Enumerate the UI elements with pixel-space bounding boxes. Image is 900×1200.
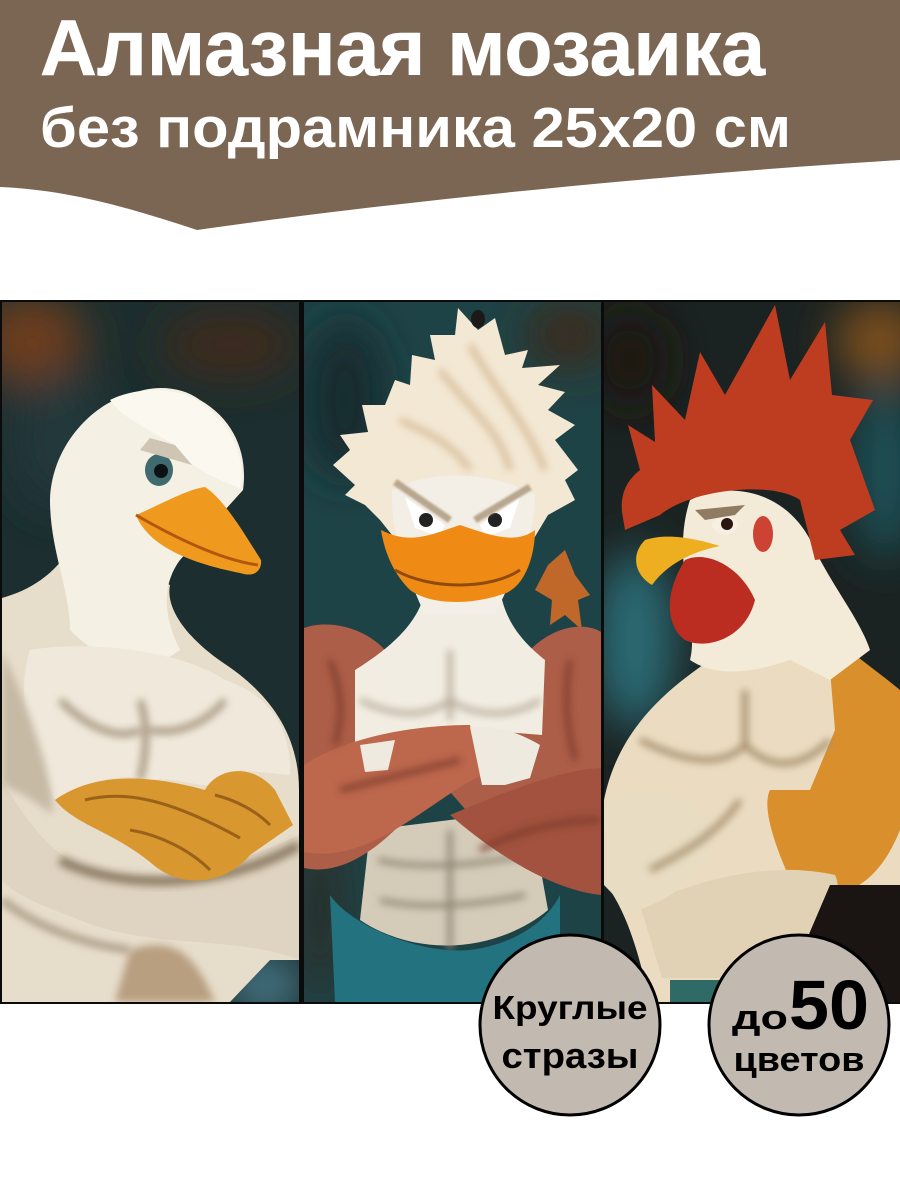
rooster comb (622, 305, 875, 560)
goose chest (24, 646, 290, 800)
rooster body (604, 658, 900, 1002)
rooster eye (712, 516, 738, 534)
rooster wattle (670, 557, 755, 644)
badge: round rhinestones: Круглые (492, 989, 648, 1026)
goose beak (136, 487, 261, 575)
rooster beak (636, 537, 720, 585)
panel: rooster (590, 300, 900, 1002)
panel: goose (0, 295, 305, 1015)
goose orange foot (55, 771, 293, 880)
badge: up to 50 colours: цветов (734, 1041, 864, 1079)
badge: up to 50 colours: 50 (789, 966, 869, 1044)
badge: round rhinestones: стразы (502, 1035, 638, 1076)
goose eye (145, 454, 173, 486)
rooster cheek (753, 516, 773, 552)
duck crest (333, 308, 578, 545)
badge: round rhinestones (480, 935, 660, 1115)
rooster neck (683, 491, 870, 680)
duck face (392, 476, 535, 615)
duck shorts (330, 895, 560, 1002)
duck top tuft (471, 310, 485, 328)
triptych frame (0, 300, 900, 1004)
subtitle: без подрамника 25х20 см (40, 96, 791, 160)
badge: up to 50 colours: до (732, 999, 788, 1037)
goose body (2, 388, 299, 1002)
badge: up to 50 colours (709, 935, 889, 1115)
duck beak (381, 525, 535, 602)
panel: duck (295, 300, 615, 1002)
duck arms (304, 624, 601, 891)
duck torso (360, 810, 548, 945)
title: Алмазная мозаика (40, 3, 766, 92)
header banner (0, 0, 900, 230)
